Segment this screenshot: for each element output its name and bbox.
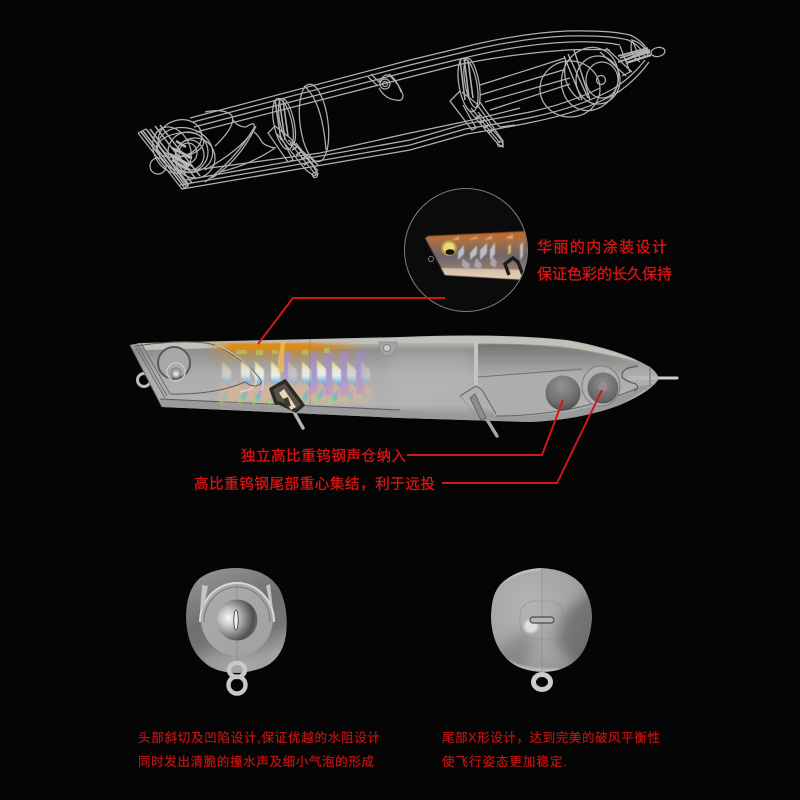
tail shading xyxy=(492,568,592,672)
front keel pin xyxy=(294,412,303,428)
tail end view xyxy=(490,568,600,690)
wireframe mid ring xyxy=(295,83,333,163)
head outer shell xyxy=(186,568,287,673)
caption: head design: 同时发出清脆的撞水声及细小气泡的形成 xyxy=(138,754,374,769)
wireframe line tie xyxy=(368,74,403,100)
rear tungsten ball xyxy=(582,366,620,406)
upper bay shading xyxy=(478,344,640,377)
head slot xyxy=(234,610,238,630)
tail eyelet xyxy=(534,674,550,690)
lower bay fill xyxy=(478,371,582,416)
callout text: sound chamber: 独立高比重钨钢声仓纳入 xyxy=(241,447,406,465)
rear keel and ribs xyxy=(460,341,638,420)
front tungsten ball xyxy=(546,376,580,410)
wireframe front keel xyxy=(268,97,318,178)
wireframe hull lines xyxy=(180,31,649,189)
head dimple xyxy=(216,600,258,640)
callout text: interior paint xyxy=(537,239,672,283)
nose cap xyxy=(622,366,658,391)
wireframe rear keel xyxy=(450,57,515,147)
callout line: paint xyxy=(258,298,445,344)
head eyelets xyxy=(228,663,246,694)
rear keel pin xyxy=(486,418,497,436)
head chamber xyxy=(158,347,190,381)
callout text: interior paint: 华丽的内涂装设计 xyxy=(537,239,667,256)
caption: tail design xyxy=(442,730,660,769)
body lower rim xyxy=(160,384,655,422)
main lure side view xyxy=(130,336,677,436)
line tie boss xyxy=(379,342,397,356)
callout line: sound chamber xyxy=(407,400,563,455)
callout text: interior paint: 保证色彩的长久保持 xyxy=(537,266,672,283)
wireframe nose chamber xyxy=(540,39,650,119)
callout line: weight transfer xyxy=(442,390,602,483)
caption: head design xyxy=(138,730,380,769)
tail eyelet xyxy=(138,374,150,386)
inset keel xyxy=(505,258,523,275)
inset lure detail xyxy=(425,231,530,280)
tail slot xyxy=(530,617,554,623)
front keel xyxy=(271,381,303,411)
caption: tail design: 使飞行姿态更加稳定. xyxy=(442,754,567,769)
lure body xyxy=(130,336,658,422)
head inner disc xyxy=(201,582,273,656)
caption: tail design: 尾部X形设计，达到完美的破风平衡性 xyxy=(442,730,660,745)
wireframe nose pin xyxy=(625,46,666,63)
orange paint xyxy=(205,343,365,366)
inset circle xyxy=(404,188,530,312)
tail raised pad xyxy=(520,601,564,639)
callout text: center of gravity: 高比重钨钢尾部重心集结，利于远投 xyxy=(194,476,435,493)
tail outer shell xyxy=(491,568,592,672)
belly shine xyxy=(385,350,470,408)
head end view xyxy=(186,568,287,694)
head contour xyxy=(130,343,170,407)
divider line at mid body xyxy=(309,339,311,415)
caption: head design: 头部斜切及凹陷设计,保证优越的水阻设计 xyxy=(138,730,380,745)
wireframe lure drawing xyxy=(138,31,666,189)
wireframe tail bundle xyxy=(138,111,275,189)
body upper rim xyxy=(142,337,640,362)
inset eye xyxy=(441,240,457,256)
holographic pattern xyxy=(220,342,370,405)
nose pin xyxy=(655,376,677,380)
